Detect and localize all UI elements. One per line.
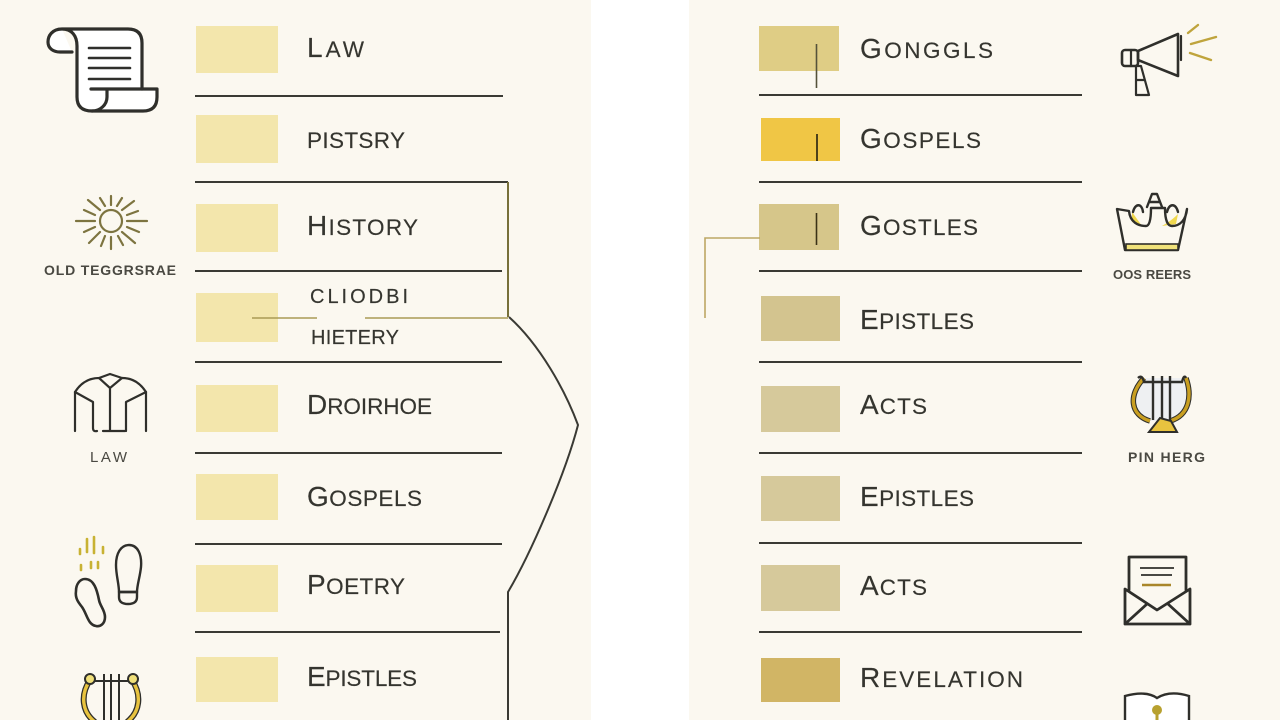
left labels: PISTSRY — [307, 128, 405, 153]
right labels: REVELATION — [860, 662, 1023, 693]
left labels: HISTORY — [307, 210, 418, 241]
left labels: DROIRHOE — [307, 389, 432, 420]
caption: old testament: OLD TEGGRSRAE — [44, 262, 176, 278]
right labels — [860, 33, 1023, 693]
left labels: EPISTLES — [307, 661, 417, 692]
panel: left — [0, 0, 591, 720]
icon: lyre with caption — [1128, 376, 1205, 465]
icon: scroll — [48, 29, 157, 111]
icon: envelope — [1125, 557, 1190, 624]
left labels: HIETERY — [311, 327, 399, 349]
panel: right — [689, 0, 1280, 720]
right labels: ACTS — [860, 389, 927, 420]
right labels: ACTS — [860, 570, 927, 601]
right labels: GOSTLES — [860, 210, 978, 241]
right labels: GOSPELS — [860, 123, 981, 154]
right labels: EPISTLES — [860, 304, 974, 335]
left labels: GOSPELS — [307, 481, 422, 512]
caption: psalms: PIN HERG — [1128, 449, 1205, 465]
right labels: EPISTLES — [860, 481, 974, 512]
icon: lyre left — [84, 674, 138, 720]
icon: megaphone — [1122, 25, 1216, 95]
right swatches — [759, 26, 840, 702]
icon: open book — [1125, 694, 1189, 720]
left labels: LAW — [307, 32, 365, 63]
icon: sun with caption — [44, 196, 176, 278]
left swatches — [196, 26, 278, 702]
left labels — [307, 32, 432, 692]
caption: law: LAW — [90, 449, 128, 466]
left labels: CLIODBI — [310, 286, 408, 308]
right divider lines — [759, 95, 1082, 632]
right labels: GONGGLS — [860, 33, 993, 64]
left divider lines — [195, 96, 508, 632]
caption: gospels: OOS REERS — [1113, 267, 1191, 282]
icon: robe with caption — [75, 374, 146, 466]
left connector lines — [252, 182, 578, 720]
icon: crown with caption — [1113, 194, 1191, 282]
right connector ticks — [705, 44, 817, 318]
left labels: POETRY — [307, 569, 405, 600]
icon: footprints — [76, 537, 141, 626]
